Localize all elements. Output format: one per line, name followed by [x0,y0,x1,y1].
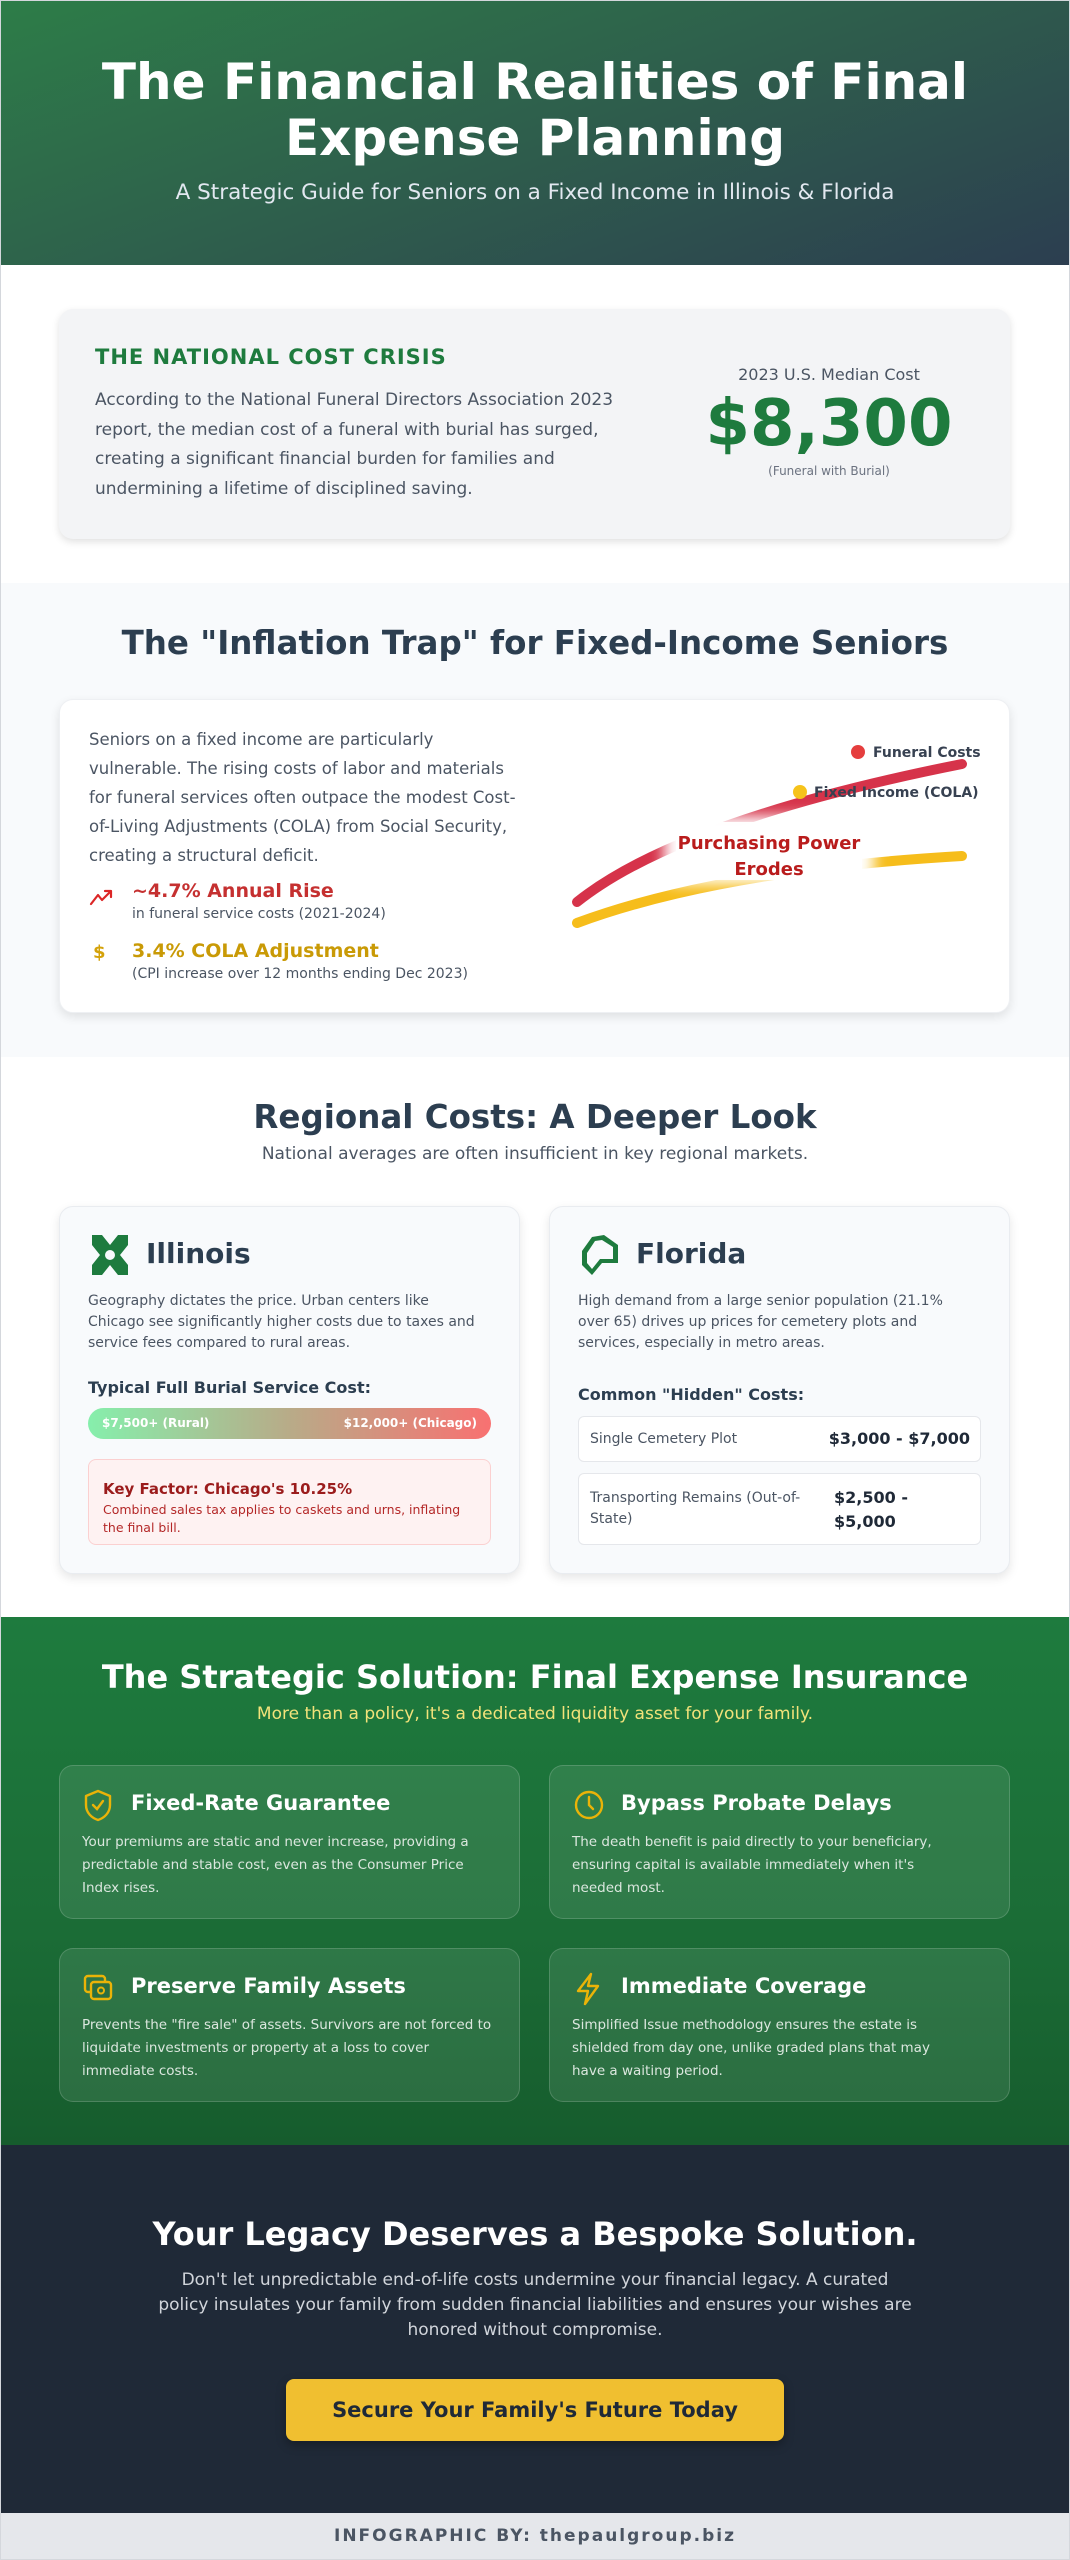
text block: legacy: Don't let unpredictable end-of-life costs undermine your financial legacy. A curated [182,2270,888,2290]
icon: dollar: $ [93,942,106,963]
card: bypass probate [549,1765,1010,1919]
bar: cost range: $12,000+ (Chicago) [344,1416,477,1430]
text block: legacy [158,2270,912,2340]
legend: Funeral Costs [873,745,981,761]
row: cemetery plot: $3,000 - $7,000 [829,1429,970,1448]
text block: legacy: policy insulates your family from sudden financial liabilities and ensures your wishes are honored without compromise. [158,2295,912,2340]
card: immediate coverage [549,1948,1010,2102]
card: immediate coverage: Simplified Issue methodology ensures the estate is shielded from day one, unlike graded plans that may have a waiting period. [572,2017,930,2079]
row: transporting remains: Transporting Remains (Out-of-State) [590,1490,800,1527]
legend [793,745,981,801]
callout: key factor: Combined sales tax applies to caskets and urns, inflating the final bill. [103,1502,460,1535]
title [102,53,968,167]
chart: purchasing power erodes: Purchasing Power [678,833,860,854]
card: bypass probate: needed most. [572,1880,665,1896]
panel: florida [549,1206,1010,1574]
panel: call to action [0,2145,1070,2513]
subtitle: A Strategic Guide for Seniors on a Fixed Income in Illinois & Florida [176,180,894,205]
icon: illinois [92,1235,128,1275]
button: secure future: Secure Your Family's Future Today [332,2398,738,2422]
footer [0,2513,1070,2560]
title: Expense Planning [285,109,785,167]
stat: cola adjustment: (CPI increase over 12 months ending Dec 2023) [132,966,468,982]
stat: median cost: 2023 U.S. Median Cost [738,365,920,384]
card: immediate coverage: Immediate Coverage [621,1974,866,1998]
chart: purchasing power erodes: Erodes [734,859,804,880]
legend: Fixed Income (COLA) [814,785,979,801]
panel: strategic solution [0,1617,1070,2145]
row: transporting remains [578,1473,981,1545]
card: bypass probate: Bypass Probate Delays [621,1791,892,1815]
stat: annual rise: ~4.7% Annual Rise [132,880,334,902]
text block: illinois description: Geography dictates the price. Urban centers like Chicago see significantly higher costs due to taxes and service fees compared to rural areas. [88,1293,475,1351]
stat: annual rise: in funeral service costs (2021-2024) [132,906,386,922]
card: bypass probate: The death benefit is paid directly to your beneficiary, ensuring capital is available immediately when it's [572,1834,932,1873]
card: preserve family assets: Preserve Family Assets [131,1974,406,1998]
icon: florida [582,1235,618,1275]
heading: inflation trap: The "Inflation Trap" for Fixed-Income Seniors [122,624,948,662]
heading: legacy: Your Legacy Deserves a Bespoke Solution. [152,2215,918,2253]
bar: cost range [88,1408,491,1439]
row: cemetery plot [578,1416,981,1462]
heading: regional costs: Regional Costs: A Deeper Look [253,1098,817,1136]
card: fixed-rate guarantee: Fixed-Rate Guarantee [131,1791,390,1815]
label: hidden costs: Common "Hidden" Costs: [578,1385,804,1404]
panel: illinois [59,1206,520,1574]
callout: key factor [88,1459,491,1545]
stat: cola adjustment: 3.4% COLA Adjustment [132,940,379,962]
heading: national cost crisis: THE NATIONAL COST CRISIS [95,345,447,369]
subtitle: regional: National averages are often insufficient in key regional markets. [262,1144,808,1164]
button: secure future [286,2379,784,2441]
heading: florida: Florida [636,1237,746,1270]
bar: cost range: $7,500+ (Rural) [102,1416,209,1430]
text block: crisis description: According to the National Funeral Directors Association 2023 report, the median cost of a funeral with burial has surged, creating a significant financial burden for families and undermining a lifetime of disciplined saving. [95,390,613,498]
stat: cola adjustment [93,940,468,982]
title: The Financial Realities of Final [102,53,968,111]
subtitle: strategic: More than a policy, it's a dedicated liquidity asset for your family. [257,1704,813,1724]
stat: annual rise [90,880,386,922]
panel: inflation trap section [0,583,1070,1057]
heading: strategic solution: The Strategic Solution: Final Expense Insurance [102,1658,968,1696]
stat: median cost: $8,300 [706,387,952,461]
panel: inflation card [59,699,1010,1013]
chart: purchasing power erodes [572,745,981,928]
card: preserve family assets [59,1948,520,2102]
stat: median cost [706,365,952,478]
label: burial cost: Typical Full Burial Service Cost: [88,1378,371,1397]
panel: national cost crisis [59,309,1010,539]
footer: INFOGRAPHIC BY: thepaulgroup.biz [334,2526,736,2546]
heading: illinois: Illinois [146,1237,251,1270]
row: transporting remains: $2,500 - $5,000 [834,1488,908,1531]
text block: florida description: High demand from a large senior population (21.1% over 65) drives up prices for cemetery plots and services, especially in metro areas. [578,1293,943,1351]
callout: key factor: Key Factor: Chicago's 10.25% [103,1480,352,1498]
card: preserve family assets: Prevents the "fire sale" of assets. Survivors are not forced to liquidate investments or property at a loss to cover immediate costs. [82,2017,491,2079]
text block: inflation description: Seniors on a fixed income are particularly vulnerable. The rising costs of labor and materials for funeral services often outpace the modest Cost-of-Living Adjustments (COLA) from Social Security, creating a structural deficit. [89,730,516,865]
stat: median cost: (Funeral with Burial) [768,464,890,478]
card: fixed-rate guarantee [59,1765,520,1919]
card: fixed-rate guarantee: Your premiums are static and never increase, providing a predictable and stable cost, even as the Consumer Price Index rises. [82,1834,469,1896]
icon: trend up [90,890,112,906]
header [0,0,1070,265]
row: cemetery plot: Single Cemetery Plot [590,1431,737,1447]
